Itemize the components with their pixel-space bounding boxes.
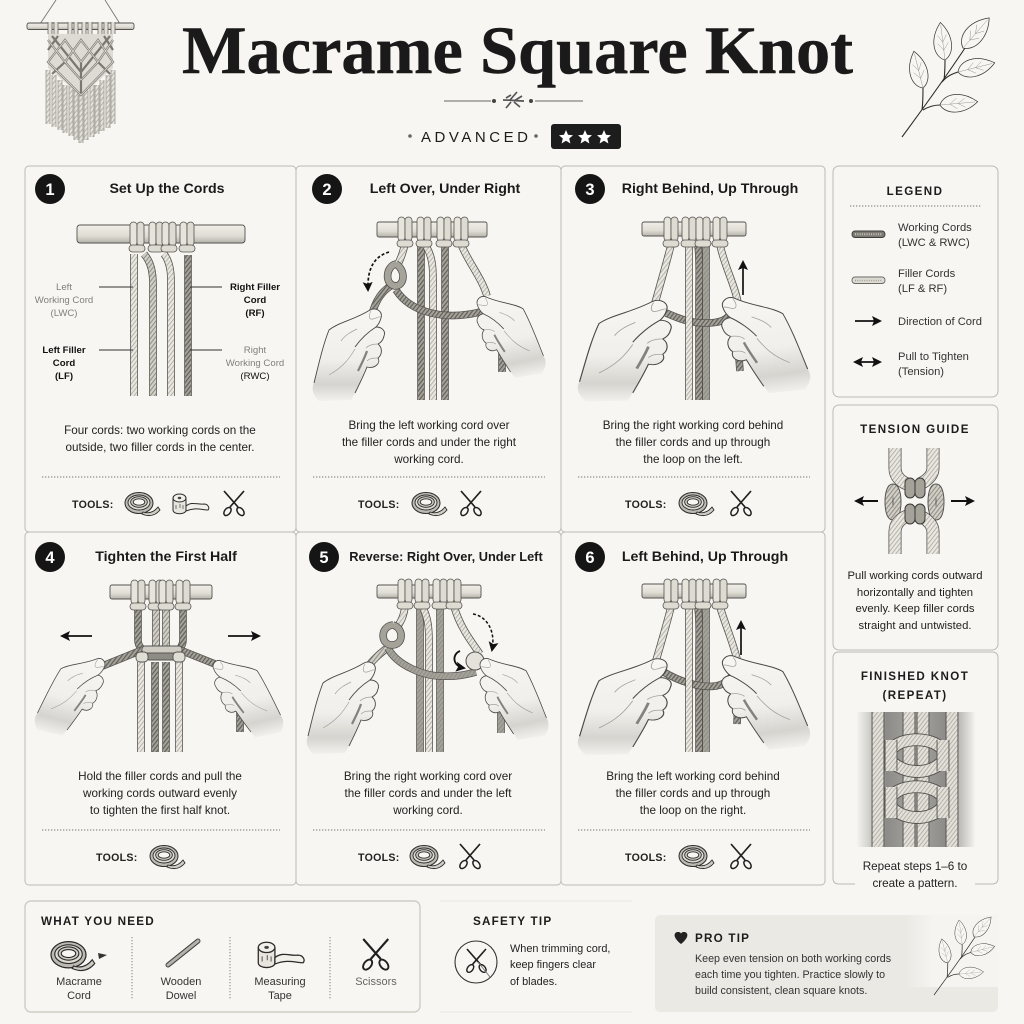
step 1 heading: Set Up the Cords bbox=[109, 181, 225, 197]
step 6 description: Bring the left working cord behind bbox=[606, 770, 780, 783]
safety text: When trimming cord, bbox=[510, 943, 610, 955]
step 5 tools: TOOLS: bbox=[358, 852, 400, 864]
step 1 diagram: cords on dowel bbox=[77, 222, 245, 396]
safety tip edges bbox=[440, 901, 632, 1012]
item: scissors bbox=[355, 939, 397, 988]
legend item: filler cords: (LF & RF) bbox=[898, 283, 947, 295]
item: wooden dowel bbox=[161, 941, 201, 1002]
step 1 badge bbox=[35, 174, 65, 204]
panel: step 5 bbox=[296, 532, 561, 885]
step 6 badge: 6 bbox=[585, 549, 595, 567]
item: macrame cord: Macrame bbox=[56, 976, 102, 988]
icon: heart bbox=[675, 932, 687, 944]
step 1 cord labels: Left bbox=[56, 282, 72, 293]
legend item: tension arrow: (Tension) bbox=[898, 366, 944, 378]
finished knot heading: (REPEAT) bbox=[882, 689, 948, 702]
what you need card bbox=[25, 901, 420, 1012]
finished knot card bbox=[833, 652, 998, 884]
step 1 cord labels: Cord bbox=[244, 295, 266, 306]
step 5 tools bbox=[358, 844, 482, 870]
panel: pro tip bbox=[655, 913, 998, 1012]
tension arrow right bbox=[951, 500, 973, 502]
item: measuring tape bbox=[254, 942, 306, 1002]
step 6 card bbox=[561, 532, 825, 885]
step 1 cord labels bbox=[35, 282, 284, 382]
safety text: of blades. bbox=[510, 976, 557, 988]
item: wooden dowel: Dowel bbox=[166, 990, 196, 1002]
tension knot illustration bbox=[889, 448, 940, 554]
step 3 badge bbox=[575, 174, 605, 204]
safety text bbox=[510, 943, 610, 988]
panel: finished knot bbox=[833, 652, 998, 890]
item: measuring tape: Tape bbox=[268, 990, 292, 1002]
step 1 cord labels: (RF) bbox=[245, 308, 265, 319]
step 2 card bbox=[296, 166, 561, 532]
step 1 tools bbox=[72, 491, 246, 517]
panel: step 1 bbox=[25, 166, 296, 532]
step 5 description: Bring the right working cord over bbox=[344, 770, 512, 783]
panel: step 2 bbox=[296, 166, 561, 532]
step 2 badge: 2 bbox=[322, 181, 332, 199]
step 6 description: the loop on the right. bbox=[640, 804, 746, 817]
tension description bbox=[848, 570, 982, 632]
step 6 description: the filler cords and up through bbox=[616, 787, 770, 800]
legend item: tension arrow: Pull to Tighten bbox=[898, 351, 969, 363]
tension description: Pull working cords outward bbox=[848, 570, 982, 582]
what you need heading: WHAT YOU NEED bbox=[41, 915, 155, 928]
step 1 cord labels: (LWC) bbox=[50, 308, 78, 319]
step 6 tools bbox=[625, 844, 753, 870]
step 1 tools: TOOLS: bbox=[72, 499, 114, 511]
item: measuring tape: Measuring bbox=[254, 976, 306, 988]
step 5 description bbox=[344, 770, 512, 817]
panel: safety tip bbox=[440, 901, 632, 1012]
step 1 description: Four cords: two working cords on the bbox=[64, 424, 256, 437]
step 4 tools bbox=[96, 846, 185, 869]
finished knot illustration bbox=[857, 712, 975, 847]
pro tip text: build consistent, clean square knots. bbox=[695, 985, 867, 997]
legend item: filler cords: Filler Cords bbox=[898, 268, 956, 280]
item: macrame cord bbox=[51, 942, 107, 1002]
legend item: direction arrow bbox=[855, 316, 982, 328]
step 1 description bbox=[64, 424, 256, 454]
step 6 badge bbox=[575, 542, 605, 572]
step 2 heading: Left Over, Under Right bbox=[370, 181, 521, 197]
step 6 description bbox=[606, 770, 780, 817]
step 4 heading: Tighten the First Half bbox=[95, 549, 237, 565]
legend item: filler cords bbox=[852, 268, 956, 295]
step 2 description: working cord. bbox=[393, 453, 464, 466]
step 5 diagram: right cord over and under bbox=[307, 579, 550, 754]
panel: step 3 bbox=[561, 166, 825, 532]
step 1 card bbox=[25, 166, 296, 532]
step 3 description: the loop on the left. bbox=[643, 453, 743, 466]
step 2 description bbox=[342, 419, 517, 466]
legend item: working cords: Working Cords bbox=[898, 222, 972, 234]
safety text: keep fingers clear bbox=[510, 959, 596, 971]
pro tip text: Keep even tension on both working cords bbox=[695, 953, 891, 965]
title: Macrame Square Knot bbox=[182, 12, 853, 88]
pro tip text bbox=[695, 953, 891, 997]
item: scissors: Scissors bbox=[355, 976, 397, 988]
step 6 diagram: left cord behind bbox=[578, 579, 812, 756]
step 1 cord labels: Working Cord bbox=[226, 358, 284, 369]
tension description: horizontally and tighten bbox=[857, 587, 973, 599]
step 3 description: Bring the right working cord behind bbox=[603, 419, 783, 432]
panel: step 4 bbox=[25, 532, 296, 885]
pro tip text: each time you tighten. Practice slowly to bbox=[695, 969, 885, 981]
step 1 cord labels: (LF) bbox=[55, 371, 73, 382]
step 5 badge bbox=[309, 542, 339, 572]
title ornament bbox=[444, 92, 583, 108]
step 6 heading: Left Behind, Up Through bbox=[622, 549, 788, 565]
illustration: small leaf sprig bbox=[934, 913, 996, 995]
step 3 tools: TOOLS: bbox=[625, 499, 667, 511]
item: wooden dowel: Wooden bbox=[161, 976, 201, 988]
pro tip card bbox=[655, 915, 998, 1012]
step 1 cord labels: Right bbox=[244, 345, 267, 356]
step 3 card bbox=[561, 166, 825, 532]
tension description: straight and untwisted. bbox=[858, 620, 972, 632]
tension heading: TENSION GUIDE bbox=[860, 423, 970, 436]
step 3 tools bbox=[625, 491, 753, 517]
legend card bbox=[833, 166, 998, 397]
step 5 description: working cord. bbox=[392, 804, 463, 817]
tension card bbox=[833, 405, 998, 650]
finished knot caption bbox=[863, 860, 968, 890]
step 1 badge: 1 bbox=[45, 181, 55, 199]
step 2 description: the filler cords and under the right bbox=[342, 436, 517, 449]
panel: tension guide bbox=[833, 405, 998, 650]
step 2 description: Bring the left working cord over bbox=[348, 419, 510, 432]
panel: what you need bbox=[25, 901, 420, 1012]
step 4 description: Hold the filler cords and pull the bbox=[78, 770, 242, 783]
step 1 cord labels: Working Cord bbox=[35, 295, 93, 306]
illustration: macrame wall hanging bbox=[27, 0, 134, 143]
tension arrow left bbox=[856, 500, 878, 502]
legend item: tension arrow bbox=[855, 351, 969, 378]
legend item: direction arrow: Direction of Cord bbox=[898, 316, 982, 328]
step 1 description: outside, two filler cords in the center. bbox=[65, 441, 255, 454]
finished knot caption: create a pattern. bbox=[872, 877, 958, 890]
legend item: working cords: (LWC & RWC) bbox=[898, 237, 970, 249]
step 4 description: to tighten the first half knot. bbox=[90, 804, 230, 817]
step 4 description bbox=[78, 770, 242, 817]
safety tip heading: SAFETY TIP bbox=[473, 915, 552, 928]
step 4 description: working cords outward evenly bbox=[82, 787, 237, 800]
step 3 description: the filler cords and up through bbox=[616, 436, 770, 449]
step 2 diagram: left cord over and under bbox=[313, 217, 547, 401]
step 1 cord labels: Cord bbox=[53, 358, 75, 369]
item: macrame cord: Cord bbox=[67, 990, 91, 1002]
difficulty stars badge bbox=[551, 124, 621, 149]
finished knot caption: Repeat steps 1–6 to bbox=[863, 860, 968, 873]
step 5 badge: 5 bbox=[319, 549, 329, 567]
panel: step 6 bbox=[561, 532, 825, 885]
step 4 badge bbox=[35, 542, 65, 572]
safety icon bbox=[455, 941, 497, 983]
panel: legend bbox=[833, 166, 998, 397]
legend heading: LEGEND bbox=[887, 185, 943, 198]
pro tip heading: PRO TIP bbox=[695, 932, 750, 945]
step 2 badge bbox=[312, 174, 342, 204]
step 3 heading: Right Behind, Up Through bbox=[622, 181, 798, 197]
step 3 description bbox=[603, 419, 783, 466]
step 1 cord labels: (RWC) bbox=[240, 371, 270, 382]
step 5 description: the filler cords and under the left bbox=[345, 787, 512, 800]
legend item: working cords bbox=[852, 222, 972, 249]
step 2 tools bbox=[358, 491, 483, 517]
step 1 cord labels: Left Filler bbox=[42, 345, 86, 356]
step 5 card bbox=[296, 532, 561, 885]
step 4 badge: 4 bbox=[45, 549, 55, 567]
step 6 tools: TOOLS: bbox=[625, 852, 667, 864]
finished knot heading bbox=[861, 670, 969, 702]
finished knot heading: FINISHED KNOT bbox=[861, 670, 969, 683]
tension description: evenly. Keep filler cords bbox=[855, 603, 975, 615]
step 3 diagram: right cord behind bbox=[578, 217, 812, 402]
difficulty label: ADVANCED bbox=[421, 129, 528, 146]
step 4 diagram: tighten first half bbox=[32, 580, 286, 752]
step 5 heading: Reverse: Right Over, Under Left bbox=[349, 549, 543, 564]
illustration: leaf sprig bbox=[902, 12, 997, 137]
step 1 cord labels: Right Filler bbox=[230, 282, 280, 293]
step 3 badge: 3 bbox=[585, 181, 595, 199]
step 4 tools: TOOLS: bbox=[96, 852, 138, 864]
step 2 tools: TOOLS: bbox=[358, 499, 400, 511]
step 4 card bbox=[25, 532, 296, 885]
